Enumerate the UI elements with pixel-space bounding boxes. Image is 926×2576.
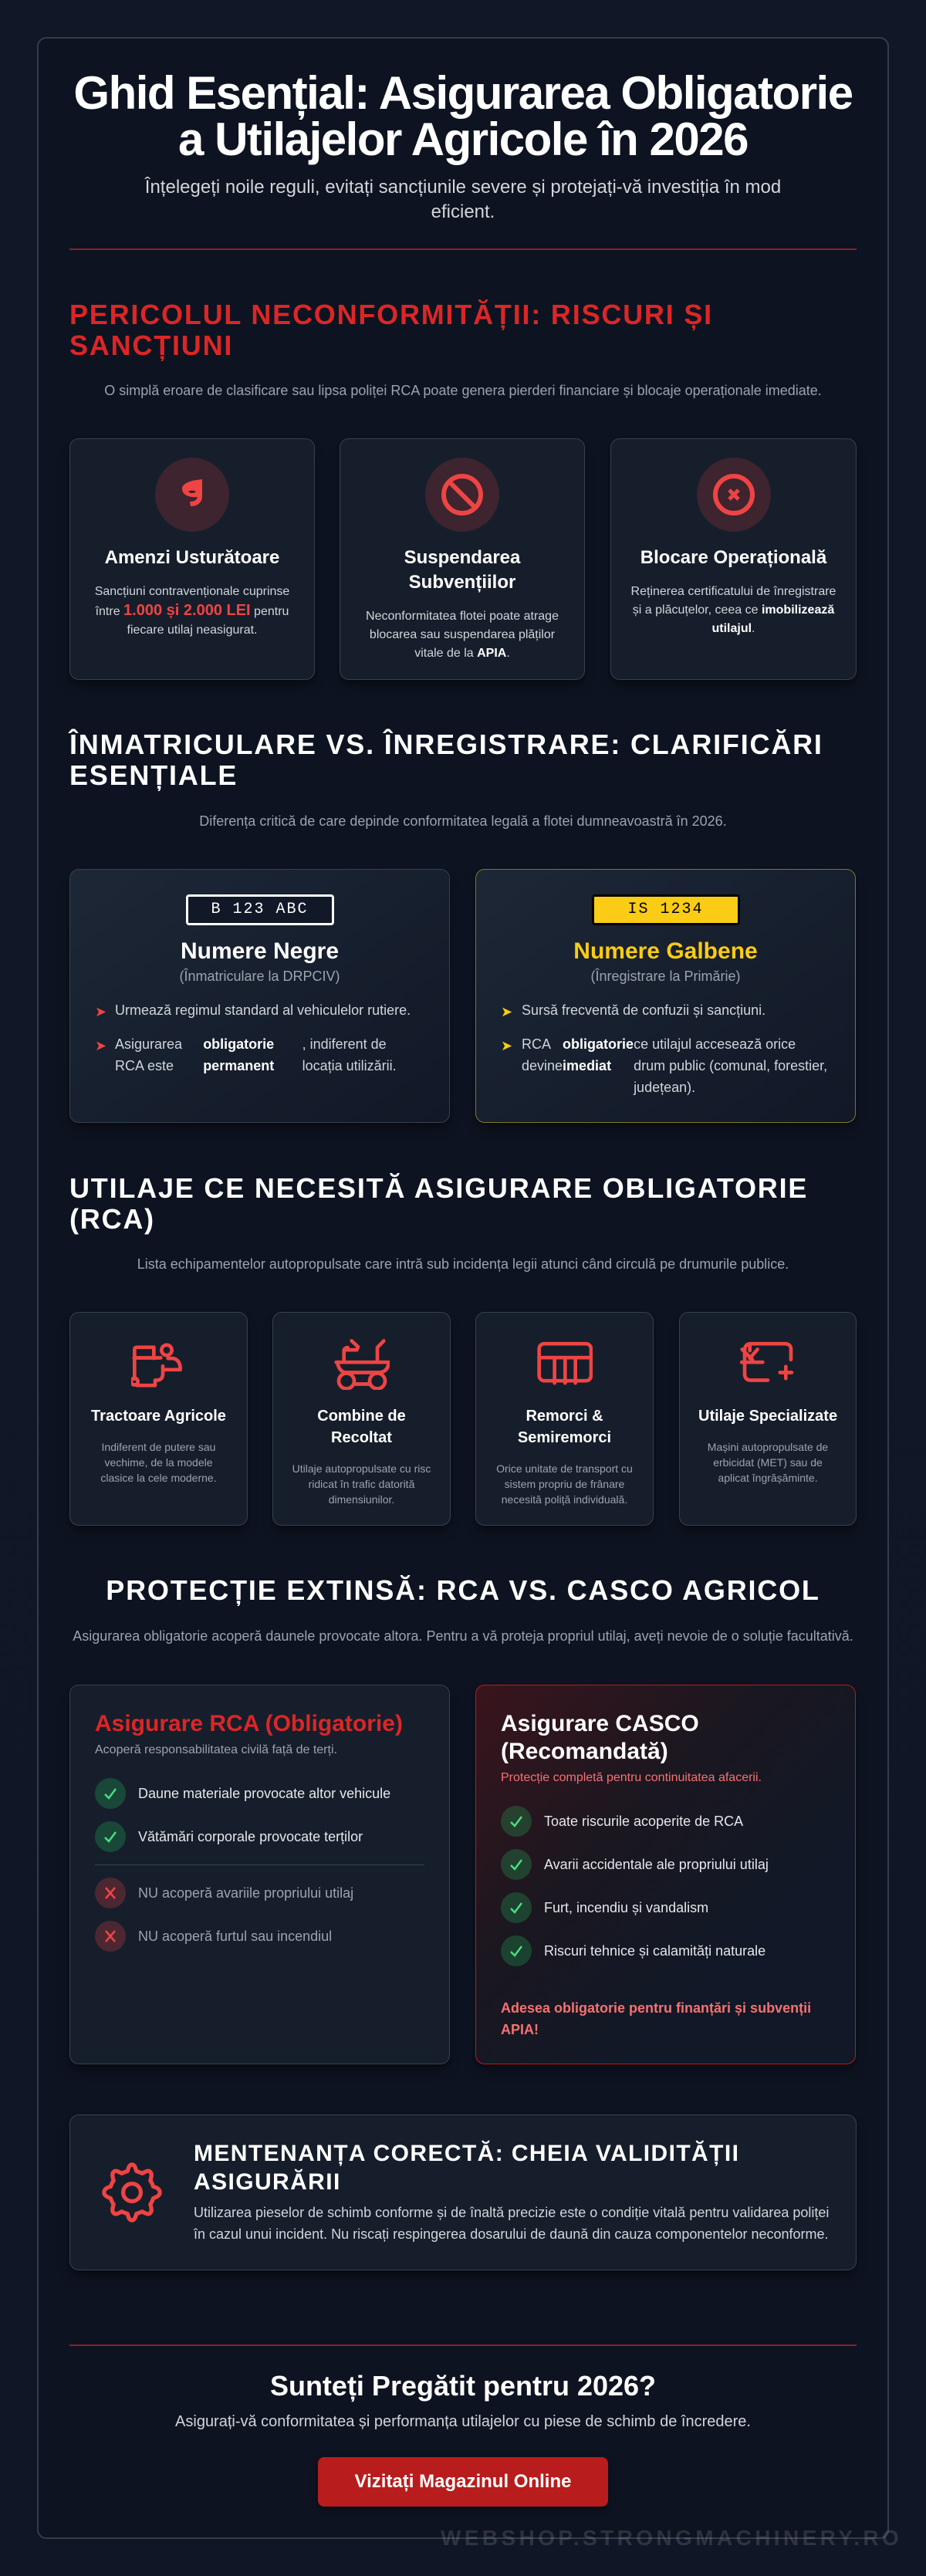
card text: Reținerea certificatului de înregistrare și a plăcuțelor, ceea ce imobilizează utilajul. (631, 585, 836, 635)
list: ➤ (95, 1004, 106, 1020)
text: protection intro: Asigurarea obligatorie acoperă daunele provocate altora. Pentru a vă proteja propriul utilaj, aveți nevoie de o soluție facultativă. (73, 1628, 853, 1644)
call to action button (318, 2457, 608, 2507)
text: machinery intro: Lista echipamentelor autopropulsate care intră sub incidența legii atunci când circulă pe drumurile publice. (137, 1256, 789, 1272)
card text: Orice unitate de transport cu sistem propriu de frânare necesită poliță individuală. (496, 1462, 633, 1506)
icon: trailer (537, 1341, 593, 1384)
list: Asigurarea RCA este , indiferent de locația utilizării. (115, 1036, 397, 1073)
title (73, 67, 853, 165)
icon: gear (102, 2162, 162, 2223)
item: covered: Toate riscurile acoperite de RCA (544, 1814, 743, 1829)
card title: Utilaje Specializate (698, 1408, 837, 1425)
watermark: WEBSHOP.STRONGMACHINERY.RO (441, 2526, 902, 2550)
subtitle: Înțelegeți noile reguli, evitați sancțiunile severe și protejați-vă investiția în mod (145, 177, 781, 198)
card text: Utilaje autopropulsate cu risc ridicat în trafic datorită dimensiunilor. (292, 1462, 431, 1506)
card title: Suspendarea Subvențiilor (404, 547, 520, 593)
card text: Neconformitatea flotei poate atrage blocarea sau suspendarea plăților vitale de la APIA. (366, 610, 559, 660)
item: covered: Riscuri tehnice și calamități naturale (544, 1943, 765, 1959)
text: registration intro: Diferența critică de care depinde conformitatea legală a flotei dumneavoastră în 2026. (199, 813, 727, 829)
note: Adesea obligatorie pentru finanțări și subvenții APIA! (501, 2000, 811, 2037)
heading: registration: ÎNMATRICULARE VS. ÎNREGISTRARE: CLARIFICĂRI ESENȚIALE (69, 729, 823, 791)
list: obligatorie imediat (563, 1036, 634, 1073)
card subtitle: (Înmatriculare la DRPCIV) (179, 969, 340, 984)
panel: subsidies (340, 438, 585, 680)
card title: Combine de Recoltat (317, 1408, 406, 1446)
panel: specialised (679, 1312, 857, 1526)
panel: RCA (69, 1685, 450, 2064)
card subtitle: Protecție completă pentru continuitatea afacerii. (501, 1771, 762, 1784)
panel: trailers (475, 1312, 654, 1526)
item: not covered (95, 1878, 353, 1908)
icon: blocked (696, 458, 770, 532)
panel: yellow plates (475, 869, 856, 1123)
icon: specialised machine (740, 1341, 793, 1382)
heading: protection: PROTECȚIE EXTINSĂ: RCA VS. CASCO AGRICOL (106, 1574, 820, 1606)
card title: Numere Galbene (573, 938, 758, 964)
card title: Remorci & Semiremorci (518, 1408, 611, 1446)
item: not covered: NU acoperă furtul sau incendiul (138, 1928, 332, 1943)
plate: yellow: IS 1234 (627, 901, 704, 918)
heading: risks: PERICOLUL NECONFORMITĂȚII: RISCURI ȘI SANCȚIUNI (69, 299, 713, 361)
card subtitle: (Înregistrare la Primărie) (590, 969, 741, 984)
panel: blocking (610, 438, 857, 680)
card text: Indiferent de putere sau vechime, de la modele clasice la cele moderne. (100, 1441, 217, 1484)
item: covered: Furt, incendiu și vandalism (544, 1900, 708, 1915)
title: a Utilajelor Agricole în 2026 (178, 113, 748, 165)
plate: yellow (591, 894, 739, 925)
item: covered (95, 1778, 390, 1809)
call to action button: Vizitați Magazinul Online (355, 2471, 571, 2492)
card title: Blocare Operațională (640, 547, 826, 568)
panel: CASCO (475, 1685, 856, 2064)
card text: Mașini autopropulsate de erbicidat (MET) sau de aplicat îngrășăminte. (708, 1441, 828, 1484)
panel: fines (69, 438, 315, 680)
item: not covered: NU acoperă avariile propriului utilaj (138, 1885, 353, 1900)
panel: harvesters (272, 1312, 451, 1526)
call to action text: Asigurați-vă conformitatea și performanța utilajelor cu piese de schimb de încredere. (175, 2413, 751, 2430)
list (95, 1002, 411, 1073)
list: ➤ (501, 1004, 512, 1020)
icon: prohibited (425, 458, 499, 532)
card subtitle: Acoperă responsabilitatea civilă față de terți. (95, 1743, 337, 1756)
subtitle (144, 177, 781, 222)
plate: black (185, 894, 333, 925)
item: covered (501, 1892, 708, 1923)
list: obligatorie permanent (203, 1036, 274, 1073)
heading: maintenance: MENTENANȚA CORECTĂ: CHEIA VALIDITĂȚII ASIGURĂRII (194, 2141, 739, 2195)
icon: fine (155, 458, 229, 532)
list: ➤ (95, 1038, 106, 1054)
card title: Asigurare CASCO (Recomandată) (501, 1711, 699, 1764)
card text: Sancțiuni contravenționale cuprinse între 1.000 și 2.000 LEI pentru fiecare utilaj neasigurat. (95, 585, 289, 637)
item: covered: Vătămări corporale provocate terților (138, 1829, 363, 1844)
header divider (69, 248, 857, 250)
list (501, 1002, 827, 1095)
card title: Numere Negre (181, 938, 339, 964)
item: covered: Avarii accidentale ale propriului utilaj (544, 1857, 769, 1872)
call to action title: Sunteți Pregătit pentru 2026? (270, 2370, 656, 2402)
list: ➤ (501, 1038, 512, 1054)
card title: Asigurare RCA (Obligatorie) (95, 1711, 403, 1736)
list: Sursă frecventă de confuzii și sancțiuni. (522, 1002, 765, 1018)
item: covered: Daune materiale provocate altor vehicule (138, 1786, 390, 1801)
title: Ghid Esențial: Asigurarea Obligatorie (73, 67, 853, 119)
item: covered (501, 1935, 765, 1966)
panel: maintenance (69, 2115, 857, 2270)
plate: black: B 123 ABC (211, 901, 309, 918)
footer divider (69, 2344, 857, 2346)
icon: tractor (131, 1343, 182, 1388)
card title: Tractoare Agricole (91, 1408, 226, 1425)
card title: Amenzi Usturătoare (105, 547, 279, 568)
text: maintenance: Utilizarea pieselor de schimb conforme și de înaltă precizie este o condiție vitală pentru validarea poliței în cazul unui incident. Nu riscați respingerea dosarului de daună din cauza componentelor neconforme. (194, 2205, 829, 2242)
item: covered (501, 1806, 744, 1837)
icon: harvester (334, 1339, 390, 1390)
item: covered (501, 1849, 769, 1880)
subtitle: eficient. (431, 201, 495, 222)
panel: black plates (69, 869, 450, 1123)
item: not covered (95, 1921, 332, 1952)
list: RCA devine ce utilajul accesează orice drum public (comunal, forestier, județean). (522, 1036, 827, 1095)
heading: machinery: UTILAJE CE NECESITĂ ASIGURARE OBLIGATORIE (RCA) (69, 1172, 808, 1235)
item: covered (95, 1821, 363, 1852)
text: risks intro: O simplă eroare de clasificare sau lipsa poliței RCA poate genera pierderi financiare și blocaje operaționale imediate. (104, 383, 822, 398)
list: Urmează regimul standard al vehiculelor rutiere. (115, 1002, 411, 1018)
panel: tractors (69, 1312, 248, 1526)
divider (95, 1864, 424, 1865)
